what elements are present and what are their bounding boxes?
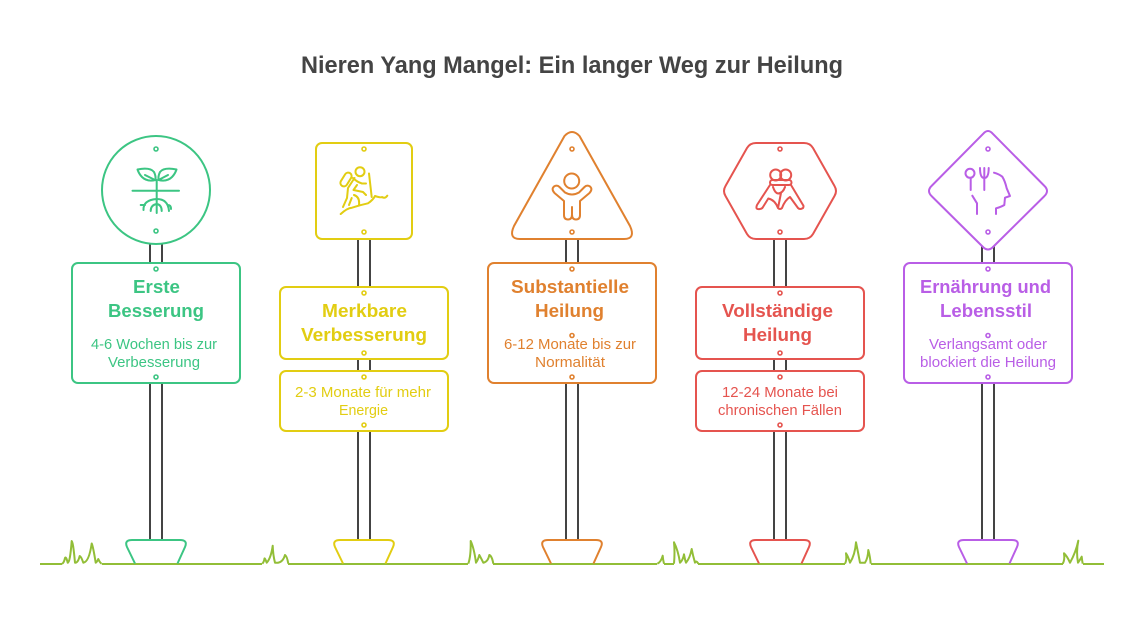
mounting dots [362,147,366,234]
description panel [696,371,864,431]
heading: Heilung [535,300,604,321]
heading [722,300,833,345]
info panel [904,263,1072,383]
signpost 5: Ernährung und Lebensstil [904,131,1072,564]
description: 12-24 Monate bei [722,385,838,401]
pole [774,238,786,540]
icon: hiker [339,167,387,214]
heading: Ernährung und [920,276,1051,297]
signpost 1: Erste Besserung [72,136,240,564]
heading: Verbesserung [301,324,427,345]
diamond sign [929,131,1047,250]
heading: Lebensstil [940,300,1032,321]
description: Normalität [535,355,605,371]
description [718,385,842,419]
description: Energie [339,403,388,419]
panel dots [154,267,158,379]
info panel [72,263,240,383]
signpost 2: Merkbare Verbesserung [280,143,448,564]
base [958,540,1018,564]
heading [301,300,427,345]
title: Nieren Yang Mangel: Ein langer Weg zur Heilung [301,52,843,79]
description [91,337,217,371]
heading [920,276,1051,321]
pole [982,245,994,540]
heading: Merkbare [322,300,407,321]
description: Verbesserung [108,355,200,371]
heading [511,276,629,321]
description [295,385,431,419]
description [504,337,636,371]
pole [566,238,578,540]
panel dots [986,267,990,379]
hexagon sign [724,143,836,239]
signpost 4: Vollständige Heilung [696,143,864,564]
heading panel dots [778,291,782,355]
ground with grass [40,541,1104,564]
description panel dots [362,375,366,427]
description panel dots [778,375,782,427]
description: 4-6 Wochen bis zur [91,337,217,353]
icon: embracing figures [756,170,804,209]
heading [108,276,204,321]
base [334,540,394,564]
heading: Substantielle [511,276,629,297]
icon: sprout with roots [132,169,179,213]
pole [150,240,162,540]
base [750,540,810,564]
circle sign [102,136,210,244]
heading panel [280,287,448,359]
description: 2-3 Monate für mehr [295,385,431,401]
description [920,337,1056,371]
base [126,540,186,564]
info panel [488,263,656,383]
heading: Heilung [743,324,812,345]
base [542,540,602,564]
description: blockiert die Heilung [920,355,1056,371]
mounting dots [570,147,574,234]
heading panel [696,287,864,359]
description: 6-12 Monate bis zur [504,337,636,353]
triangle sign [512,132,632,239]
mounting dots [986,147,990,234]
mounting dots [778,147,782,234]
pole [358,238,370,540]
square sign [316,143,412,239]
heading: Erste [133,276,180,297]
heading: Vollständige [722,300,833,321]
heading: Besserung [108,300,204,321]
description panel [280,371,448,431]
mounting dots [154,147,158,233]
icon: spoon, fork and head [966,168,1010,214]
heading panel dots [362,291,366,355]
signpost 3: Substantielle Heilung [488,132,656,564]
description: Verlangsamt oder [929,337,1047,353]
panel dots [570,267,574,379]
description: chronischen Fällen [718,403,842,419]
icon: child with raised arms [553,174,591,220]
